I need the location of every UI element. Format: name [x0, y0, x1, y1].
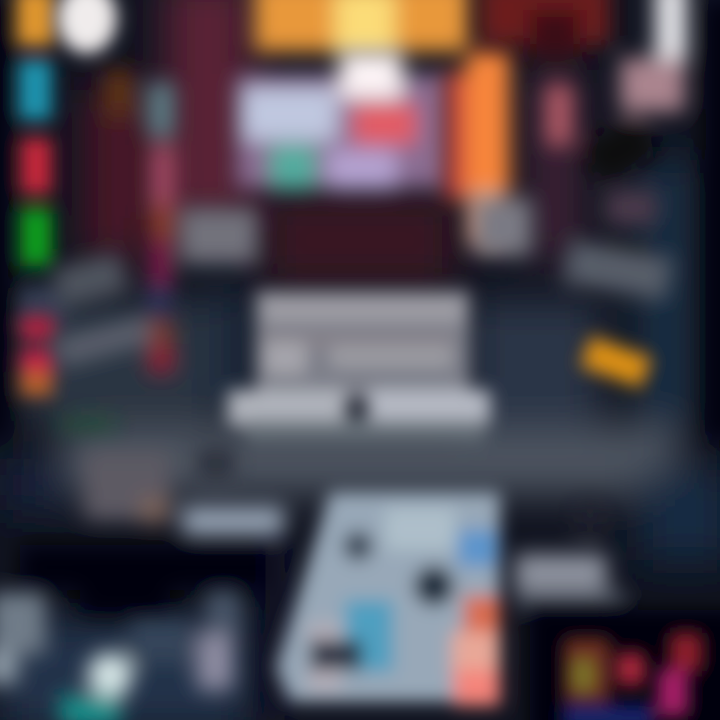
lower right card — [515, 504, 626, 612]
top banner glow — [254, 0, 469, 55]
right grey bars — [562, 239, 673, 301]
left column of coloured icons — [16, 0, 66, 326]
central phone panel — [276, 492, 500, 706]
title block — [228, 290, 490, 442]
lower right dark chart panel — [530, 610, 720, 720]
top white accent — [57, 0, 117, 54]
lower left small icons — [0, 590, 241, 720]
orange vertical bar — [446, 50, 510, 245]
right panel — [474, 0, 687, 284]
yellow badge — [580, 336, 652, 388]
central illustration — [236, 52, 446, 190]
lower left column icons — [20, 316, 54, 396]
lower left cards — [84, 448, 284, 536]
secondary left column — [51, 70, 258, 430]
